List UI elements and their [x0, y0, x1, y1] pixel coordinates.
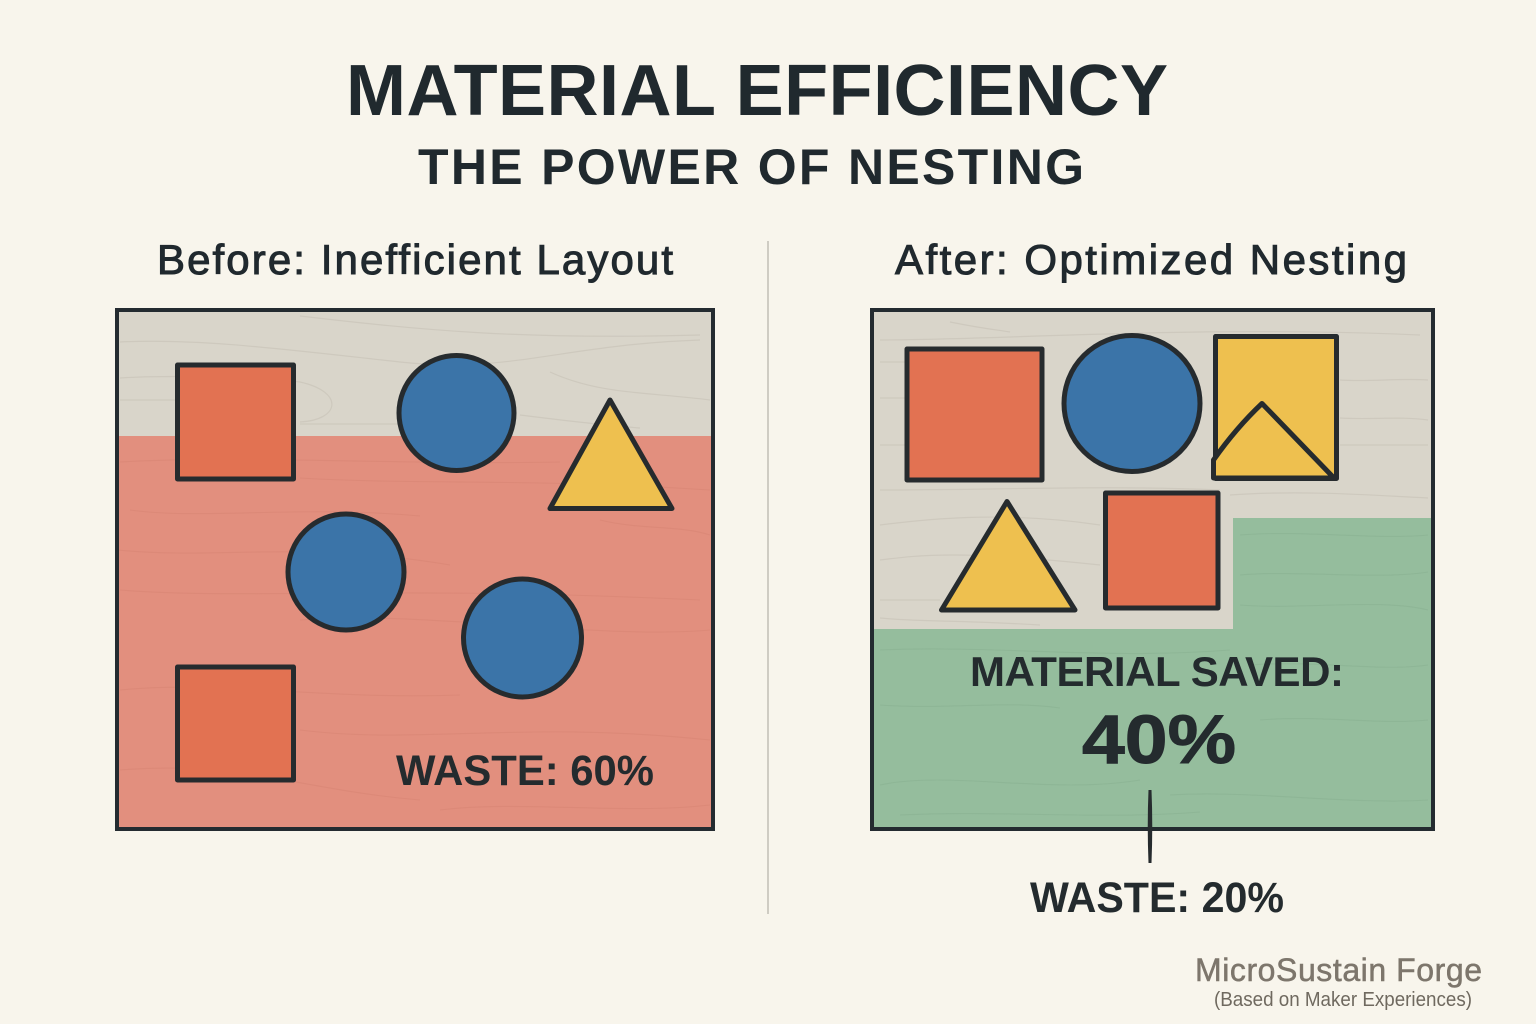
- triangle: lower: [942, 502, 1075, 610]
- yellow rectangle with nested triangle: [1214, 336, 1336, 478]
- panel: before, inefficient layout sheet: [117, 310, 713, 829]
- label: material saved: MATERIAL SAVED:: [970, 648, 1344, 695]
- source note: (Based on Maker Experiences): [1214, 989, 1472, 1011]
- square: bottom left: [178, 667, 294, 780]
- heading: before: Before: Inefficient Layout: [157, 236, 673, 283]
- square: top left: [178, 365, 294, 479]
- square: large: [907, 349, 1042, 480]
- leader line to waste label: [1149, 790, 1151, 863]
- label: 40%: 40%: [1082, 701, 1236, 778]
- triangle: [550, 400, 672, 508]
- circle: middle: [288, 514, 404, 630]
- circle: right: [464, 579, 582, 697]
- label: waste 20%: WASTE: 20%: [1030, 874, 1284, 922]
- square: lower: [1106, 493, 1218, 608]
- title: MATERIAL EFFICIENCY: [346, 51, 1168, 131]
- subtitle: THE POWER OF NESTING: [418, 139, 1084, 195]
- brand: MicroSustain Forge: MicroSustain Forge: [1195, 952, 1482, 988]
- heading: after: After: Optimized Nesting: [895, 236, 1407, 283]
- panel: after, optimized nesting sheet: [872, 310, 1433, 830]
- circle: top: [399, 356, 514, 470]
- circle: large: [1064, 336, 1200, 472]
- label: waste 60%: WASTE: 60%: [396, 747, 654, 795]
